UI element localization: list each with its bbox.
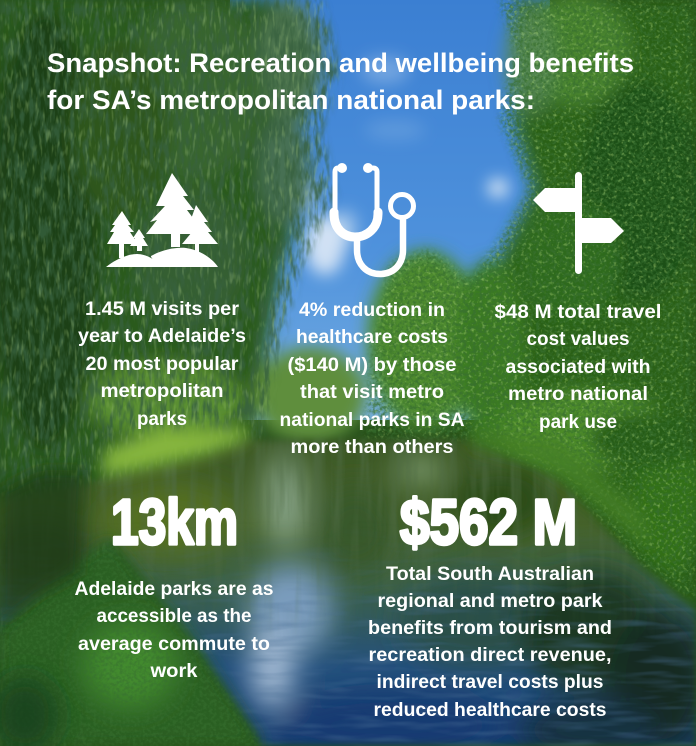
text: travel cost: associated with bbox=[506, 356, 650, 378]
title: Snapshot: Recreation and wellbeing benefits bbox=[47, 48, 634, 78]
text: healthcare bbox=[280, 299, 464, 458]
text: total benefits bbox=[368, 563, 612, 721]
stat: 13km: 13km bbox=[111, 486, 238, 558]
text: healthcare: healthcare costs bbox=[296, 326, 448, 348]
text: commute bbox=[74, 578, 274, 682]
text: travel cost: $48 M total travel bbox=[494, 301, 662, 323]
text: travel cost: metro national bbox=[508, 383, 648, 405]
text: visits: parks bbox=[137, 408, 187, 430]
text: total benefits: Total South Australian bbox=[386, 563, 594, 585]
title: for SA’s metropolitan national parks: bbox=[47, 85, 535, 115]
text: visits: 1.45 M visits per bbox=[85, 298, 239, 320]
text: commute: accessible as the bbox=[96, 605, 252, 627]
icon: pine trees on hills bbox=[106, 173, 218, 267]
text: total benefits: indirect travel costs plus bbox=[376, 671, 604, 693]
icon: stethoscope bbox=[334, 163, 414, 274]
foreground foliage bottom-left bbox=[0, 470, 270, 746]
text: visits: year to Adelaide’s bbox=[78, 325, 246, 347]
text: total benefits: benefits from tourism and bbox=[368, 617, 612, 639]
text: visits: 20 most popular bbox=[86, 353, 239, 375]
text: healthcare: ($140 M) by those bbox=[288, 354, 457, 376]
text: commute: work bbox=[149, 660, 198, 682]
text: healthcare: that visit metro bbox=[300, 381, 444, 403]
text: total benefits: reduced healthcare costs bbox=[374, 699, 607, 721]
text: travel cost: cost values bbox=[526, 328, 630, 350]
title bbox=[47, 48, 634, 115]
stat: $562 M: $562 M bbox=[400, 486, 577, 558]
text: commute: Adelaide parks are as bbox=[74, 578, 274, 600]
text: visits: metropolitan bbox=[100, 380, 224, 402]
text: healthcare: national parks in SA bbox=[280, 409, 464, 431]
text: travel cost bbox=[494, 301, 662, 433]
text: total benefits: recreation direct revenue, bbox=[368, 644, 612, 666]
text: healthcare: 4% reduction in bbox=[299, 299, 445, 321]
text: travel cost: park use bbox=[539, 411, 617, 433]
text: healthcare: more than others bbox=[290, 436, 454, 458]
text: total benefits: regional and metro park bbox=[378, 590, 603, 612]
text: commute: average commute to bbox=[78, 633, 270, 655]
icon: signpost bbox=[533, 172, 624, 274]
text: visits bbox=[78, 298, 246, 430]
